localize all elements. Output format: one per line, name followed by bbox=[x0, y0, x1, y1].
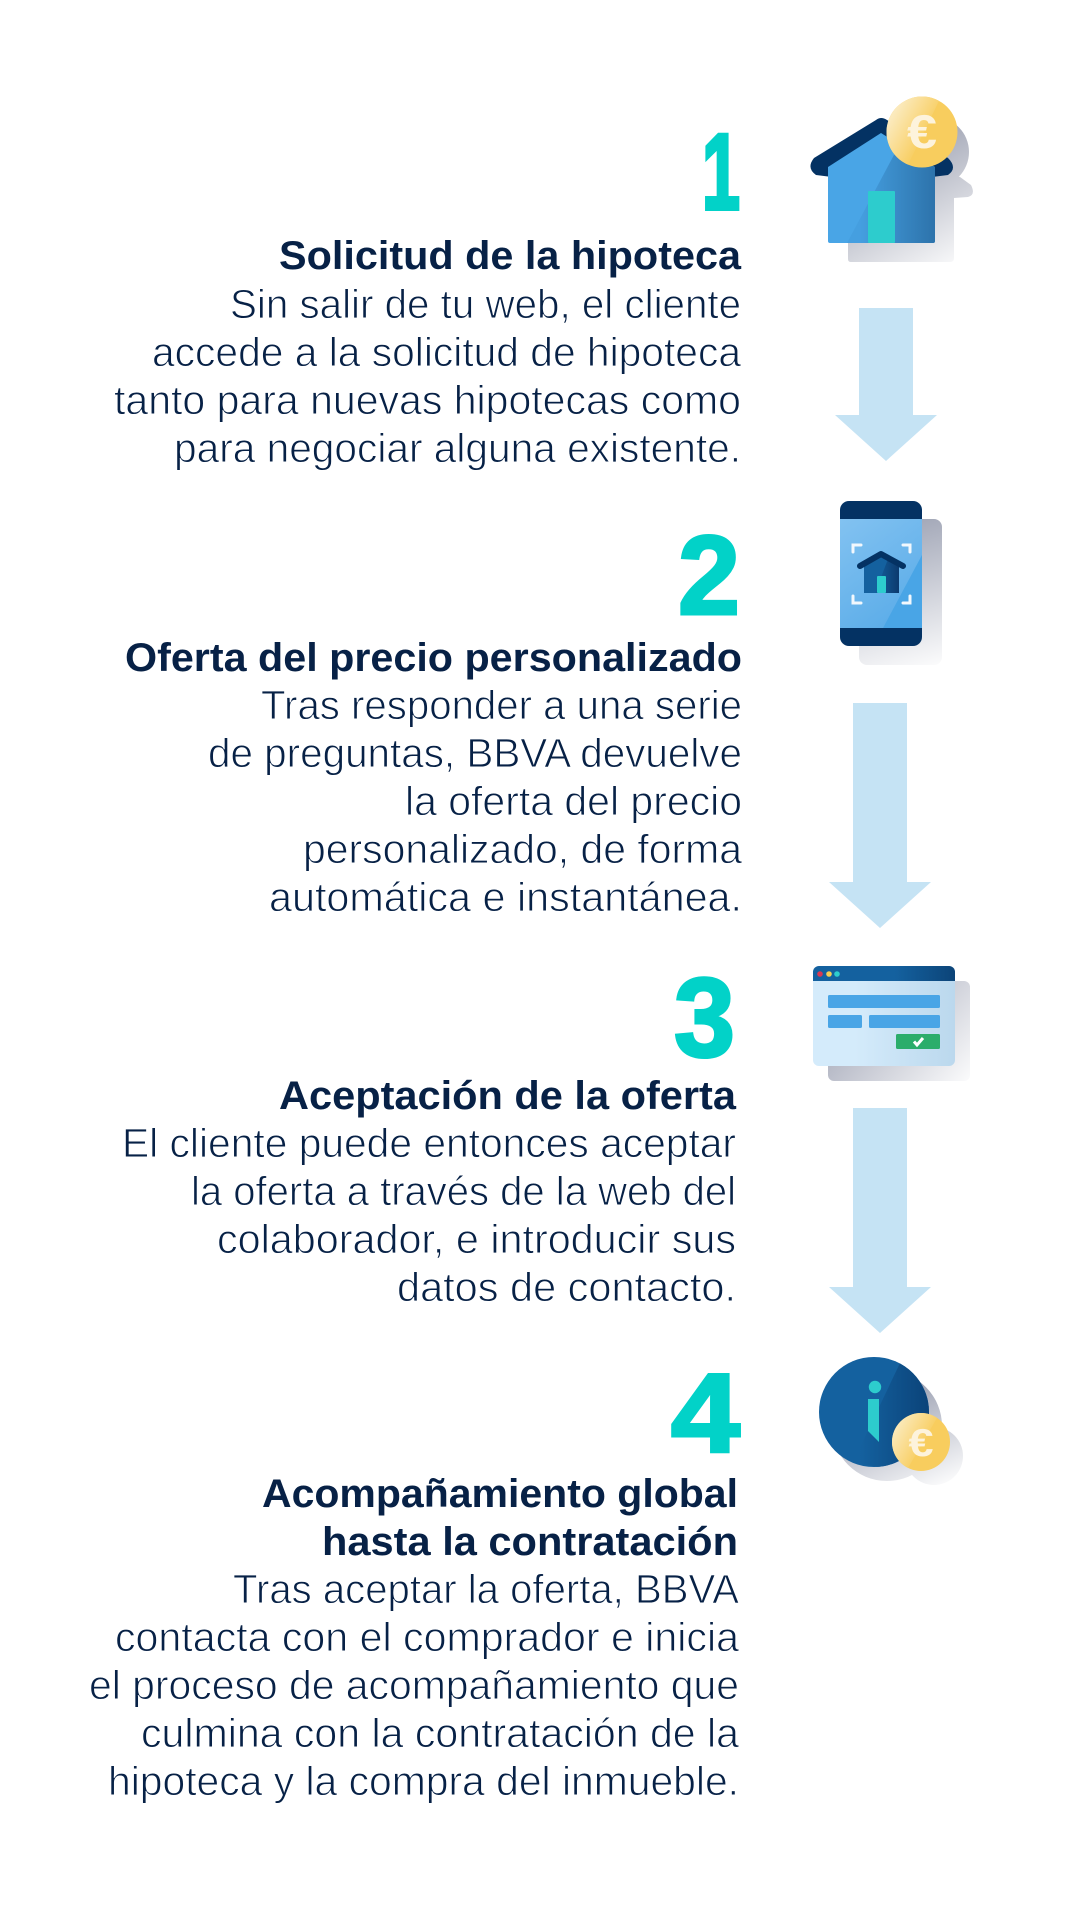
arrow 3 bbox=[829, 1108, 931, 1333]
step 1 heading: Solicitud de la hipoteca bbox=[279, 234, 742, 278]
step 3 body text: colaborador, e introducir sus bbox=[217, 1216, 736, 1262]
step 3 number: 3 bbox=[674, 955, 735, 1080]
step 1 number: 1 bbox=[702, 111, 740, 232]
step 3 heading: Aceptación de la oferta bbox=[279, 1074, 737, 1118]
step 2 heading: Oferta del precio personalizado bbox=[125, 636, 742, 680]
step 2 number: 2 bbox=[678, 513, 740, 638]
step 3 body text: datos de contacto. bbox=[397, 1264, 736, 1310]
step 2 body text: la oferta del precio bbox=[405, 778, 742, 824]
step 2 body text bbox=[208, 682, 742, 920]
icon: house with euro coin bbox=[810, 90, 973, 262]
step 1 body text: accede a la solicitud de hipoteca bbox=[152, 329, 741, 375]
step 2 body text: Tras responder a una serie bbox=[261, 682, 742, 728]
step 1 body text bbox=[114, 281, 741, 471]
icon: phone with house bbox=[840, 501, 942, 665]
step 1 body text: tanto para nuevas hipotecas como bbox=[114, 377, 741, 423]
step 4 body text: hipoteca y la compra del inmueble. bbox=[108, 1758, 739, 1804]
step 4 body text: el proceso de acompañamiento que bbox=[89, 1662, 739, 1708]
icon: web form window bbox=[813, 966, 970, 1081]
arrow 1 bbox=[835, 308, 937, 461]
step 2 body text: automática e instantánea. bbox=[269, 874, 742, 920]
icon: info circle with euro coin bbox=[819, 1350, 963, 1485]
step 2 body text: de preguntas, BBVA devuelve bbox=[208, 730, 742, 776]
step 4 heading: Acompañamiento global bbox=[262, 1472, 738, 1516]
step 4 number: 4 bbox=[671, 1351, 740, 1476]
step 3 body text: la oferta a través de la web del bbox=[191, 1168, 736, 1214]
step 4 body text bbox=[89, 1566, 740, 1804]
step 3 body text bbox=[122, 1120, 736, 1310]
arrow 2 bbox=[829, 703, 931, 928]
step 1 body text: para negociar alguna existente. bbox=[174, 425, 741, 471]
step 4 body text: contacta con el comprador e inicia bbox=[115, 1614, 739, 1660]
step 4 heading: hasta la contratación bbox=[322, 1520, 738, 1564]
icon: house with euro coin: € bbox=[907, 105, 937, 158]
step 4 body text: Tras aceptar la oferta, BBVA bbox=[233, 1566, 740, 1612]
step 1 body text: Sin salir de tu web, el cliente bbox=[230, 281, 741, 327]
icon: info circle with euro coin: € bbox=[908, 1422, 934, 1465]
step 4 heading bbox=[262, 1472, 738, 1564]
step 4 body text: culmina con la contratación de la bbox=[141, 1710, 739, 1756]
step 2 body text: personalizado, de forma bbox=[303, 826, 742, 872]
step 3 body text: El cliente puede entonces aceptar bbox=[122, 1120, 736, 1166]
